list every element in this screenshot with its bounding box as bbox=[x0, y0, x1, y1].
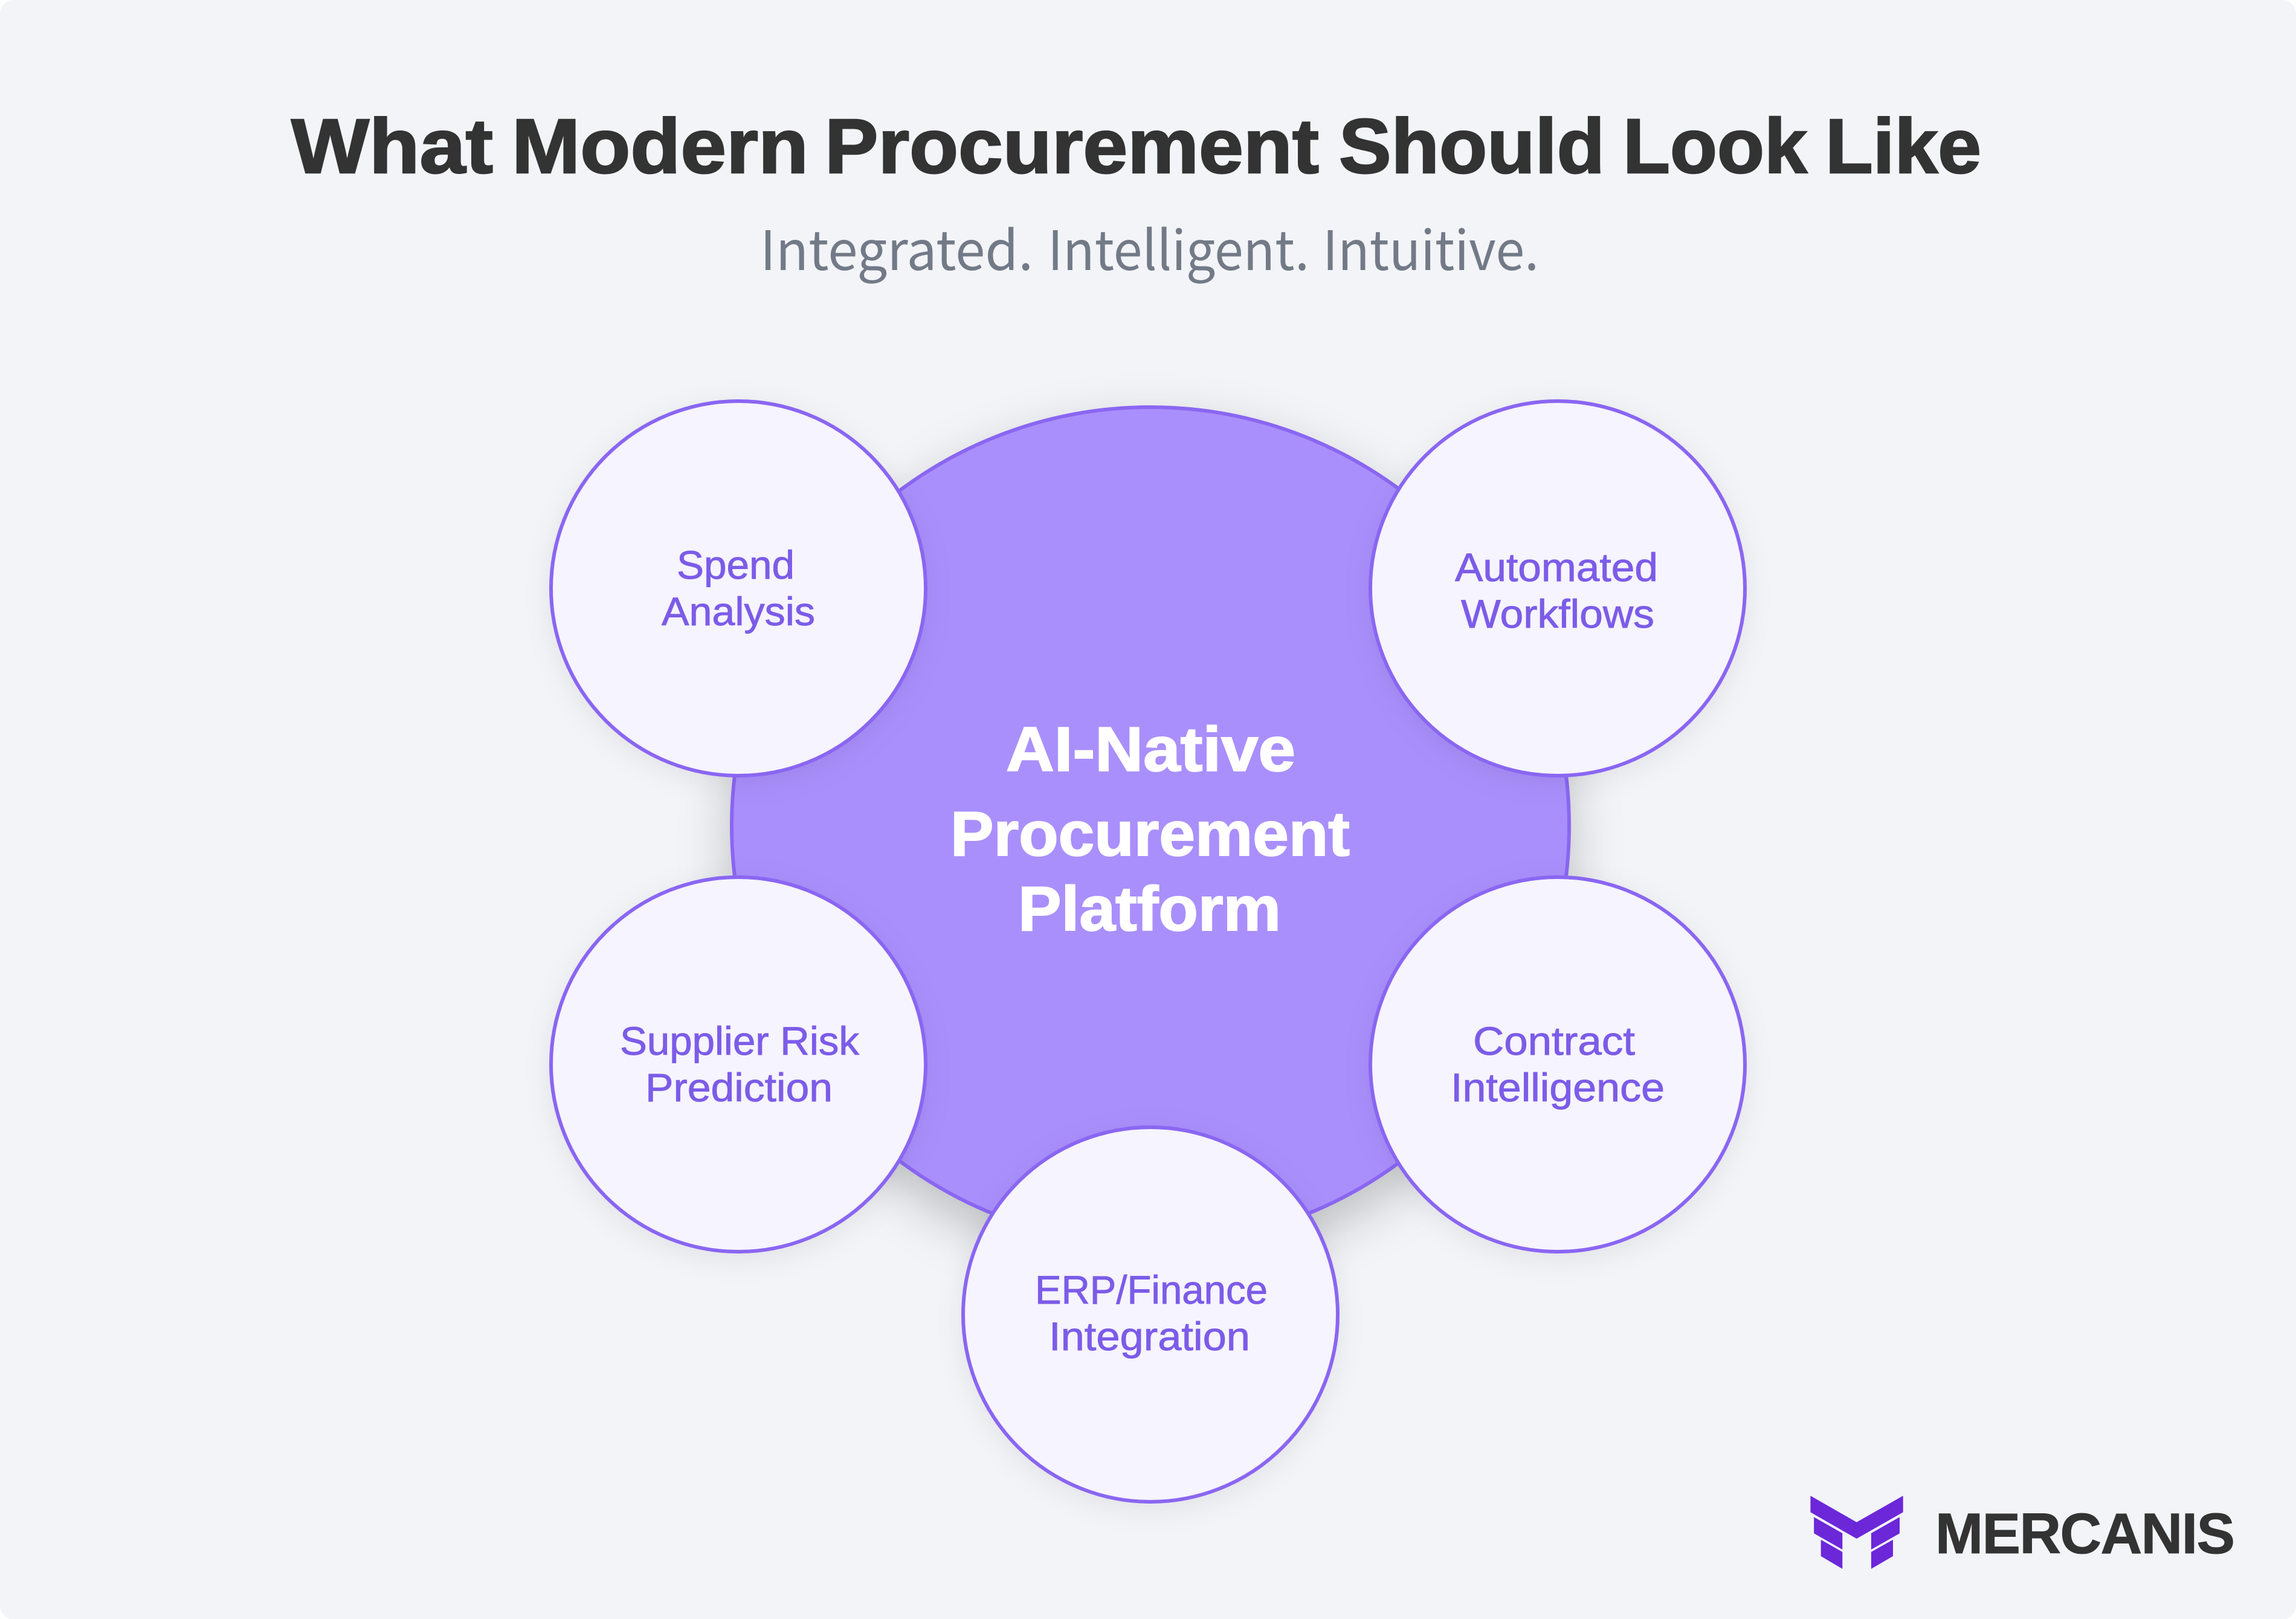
node: ERP/Finance Integration bbox=[963, 1127, 1338, 1502]
central label: Platform bbox=[1018, 874, 1281, 944]
node: Automated Workflows: Workflows bbox=[1461, 591, 1654, 636]
node: Supplier Risk Prediction: Prediction bbox=[645, 1065, 833, 1110]
central label: Procurement bbox=[950, 799, 1350, 869]
node: Supplier Risk Prediction: Supplier Risk bbox=[620, 1019, 860, 1063]
title bbox=[291, 103, 1981, 190]
central circle: AI-Native Procurement Platform bbox=[732, 407, 1569, 1244]
title: Look bbox=[1623, 103, 1808, 190]
node: Spend Analysis bbox=[551, 401, 926, 776]
title: Procurement bbox=[825, 103, 1319, 190]
subtitle: Intuitive. bbox=[1323, 207, 1539, 286]
subtitle: Integrated. bbox=[760, 207, 1033, 286]
title: What bbox=[291, 103, 493, 190]
subtitle bbox=[760, 207, 1539, 286]
node: Contract Intelligence bbox=[1370, 877, 1745, 1252]
node: Contract Intelligence: Intelligence bbox=[1451, 1065, 1665, 1110]
node: ERP/Finance Integration: Integration bbox=[1049, 1314, 1250, 1359]
central label: AI-Native bbox=[1006, 715, 1295, 785]
title: Modern bbox=[512, 103, 808, 190]
node: Spend Analysis: Spend bbox=[677, 542, 795, 587]
node: Spend Analysis: Analysis bbox=[662, 589, 815, 634]
title: Like bbox=[1825, 103, 1981, 190]
logo: Mercanis mark bbox=[1810, 1496, 1903, 1569]
node: Contract Intelligence: Contract bbox=[1473, 1019, 1635, 1063]
title: Should bbox=[1339, 103, 1605, 190]
node: Automated Workflows: Automated bbox=[1455, 545, 1658, 590]
central label bbox=[950, 715, 1350, 944]
logo: Mercanis wordmark: MERCANIS bbox=[1935, 1502, 2235, 1566]
node: Supplier Risk Prediction bbox=[551, 877, 926, 1252]
node: ERP/Finance Integration: ERP/Finance bbox=[1035, 1267, 1268, 1312]
subtitle: Intelligent. bbox=[1048, 207, 1309, 286]
node: Automated Workflows bbox=[1370, 401, 1745, 776]
